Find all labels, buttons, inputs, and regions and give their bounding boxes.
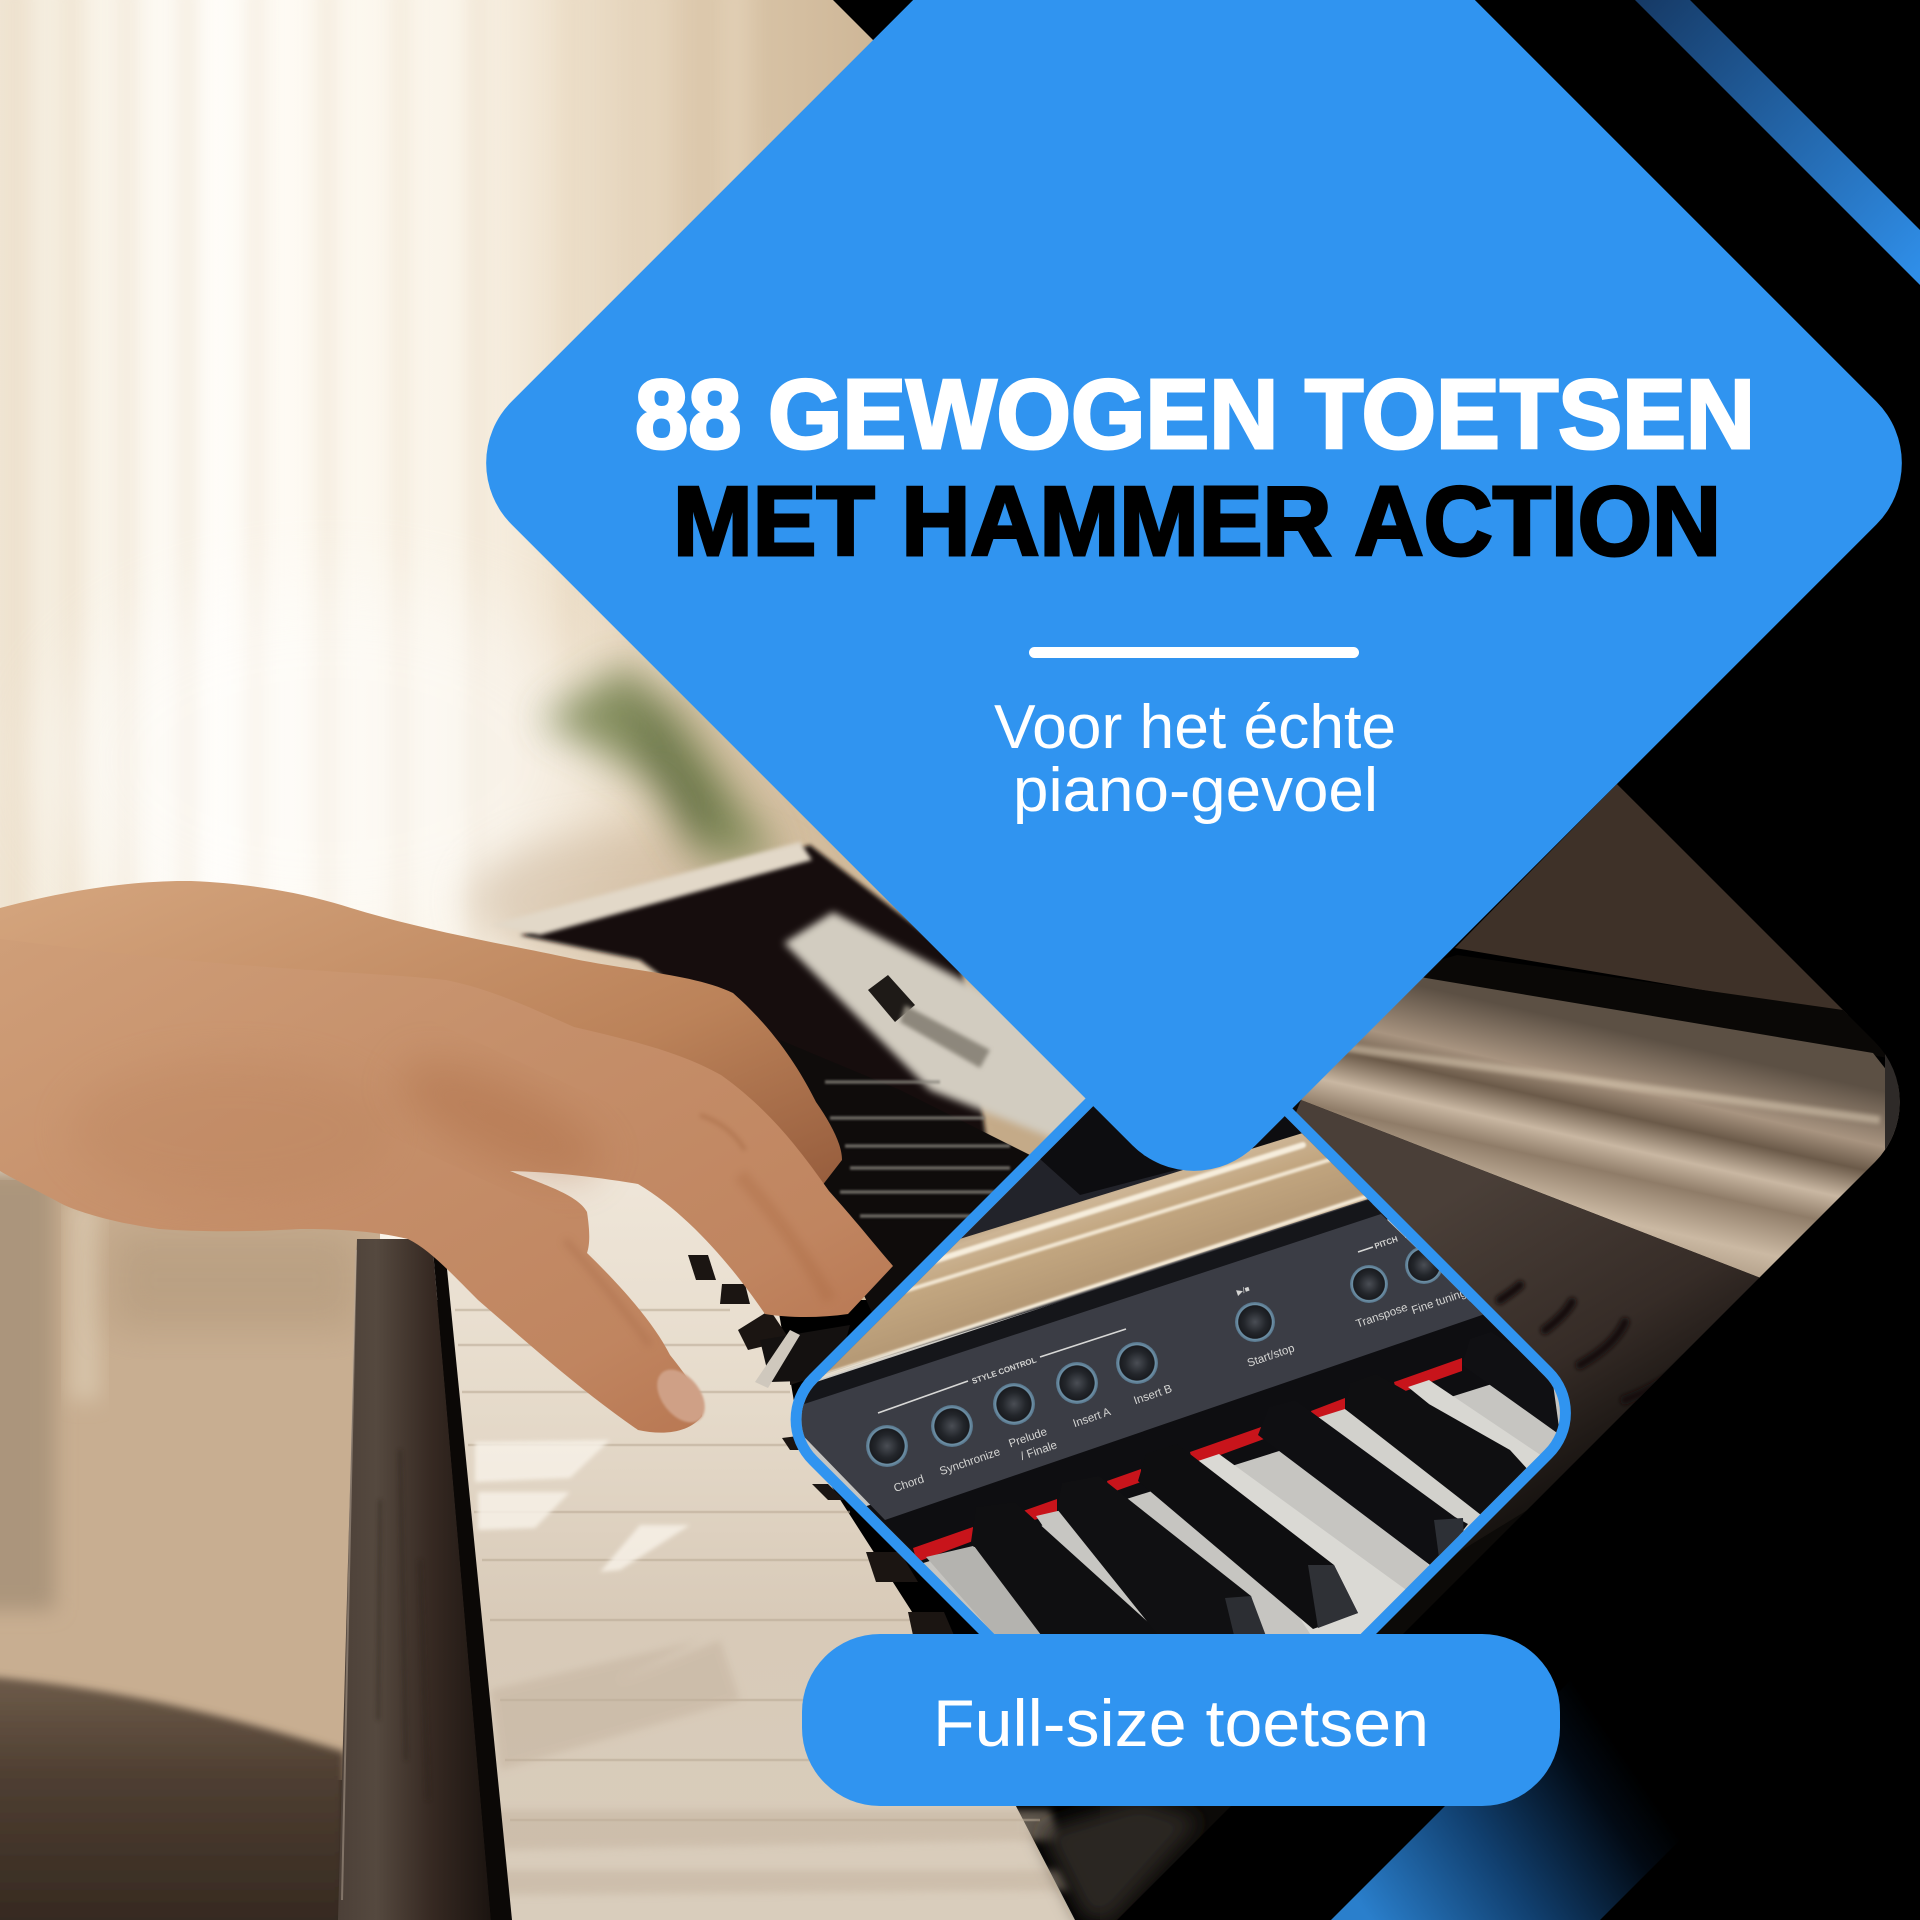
inset dark top and keybed xyxy=(802,1106,1560,1634)
champagne rail xyxy=(821,1133,1368,1379)
panel labels: Insert B xyxy=(1132,1383,1174,1407)
accent: top-right blue stripe xyxy=(1635,0,1920,285)
panel labels: Synchronize xyxy=(938,1446,1002,1478)
main blue diamond panel xyxy=(450,0,1920,1207)
black keys xyxy=(971,1332,1560,1700)
near black key tops beside fingers xyxy=(755,1325,850,1388)
panel labels: Prelude xyxy=(1007,1426,1049,1450)
knobs xyxy=(866,1246,1443,1467)
blurred plant xyxy=(540,665,780,860)
panel labels: Start/stop xyxy=(1246,1342,1296,1370)
panel labels: Insert A xyxy=(1072,1406,1113,1430)
panel labels xyxy=(892,1234,1468,1495)
key gap stubs along keybed xyxy=(688,1255,1200,1920)
heading: met hammer action: MET HAMMER ACTION xyxy=(673,466,1721,576)
pill callout: full-size toetsen xyxy=(802,1634,1560,1806)
sofa dark foreground xyxy=(0,1674,345,1920)
panel labels: Chord xyxy=(892,1473,926,1495)
black strip under rail xyxy=(802,1200,1388,1412)
red felt strips xyxy=(913,1358,1462,1562)
subtitle text: piano-gevoel xyxy=(1013,756,1378,825)
upper piano: dark fall and control panel xyxy=(513,841,1086,1139)
heading: 88 gewogen toetsen: 88 GEWOGEN TOETSEN xyxy=(635,359,1755,469)
subtitle text: Voor het échte xyxy=(994,693,1396,762)
accent: bottom-right blue gradient band xyxy=(1331,1676,1720,1920)
pill callout: full-size toetsen: Full-size toetsen xyxy=(933,1686,1429,1760)
inset frame: blue border diamond xyxy=(791,1000,1571,1700)
far black keys xyxy=(802,1076,1030,1312)
panel labels: Fine tuning xyxy=(1410,1287,1468,1317)
subtitle text xyxy=(994,693,1396,825)
right-hand piano body xyxy=(1100,784,1920,1920)
panel labels: PITCH xyxy=(1373,1234,1399,1251)
silver key surfaces xyxy=(926,1380,1560,1700)
divider line xyxy=(1029,647,1359,658)
panel labels: STYLE CONTROL xyxy=(971,1355,1038,1386)
wooden key rail xyxy=(338,1239,512,1920)
curtain backdrop xyxy=(0,0,1052,1300)
white piano keys xyxy=(440,1170,1075,1920)
panel labels: Transpose xyxy=(1355,1302,1409,1331)
dark front band xyxy=(866,1302,1538,1563)
room floor beige xyxy=(0,1170,380,1780)
front hand xyxy=(0,939,893,1433)
back hand xyxy=(0,881,842,1184)
panel labels: ▶/■ xyxy=(1235,1284,1251,1297)
panel labels: / Finale xyxy=(1019,1439,1059,1463)
panel divider lines xyxy=(878,1232,1420,1413)
inset photo: digital piano control panel xyxy=(802,1106,1560,1634)
grey control panel xyxy=(780,1214,1485,1520)
